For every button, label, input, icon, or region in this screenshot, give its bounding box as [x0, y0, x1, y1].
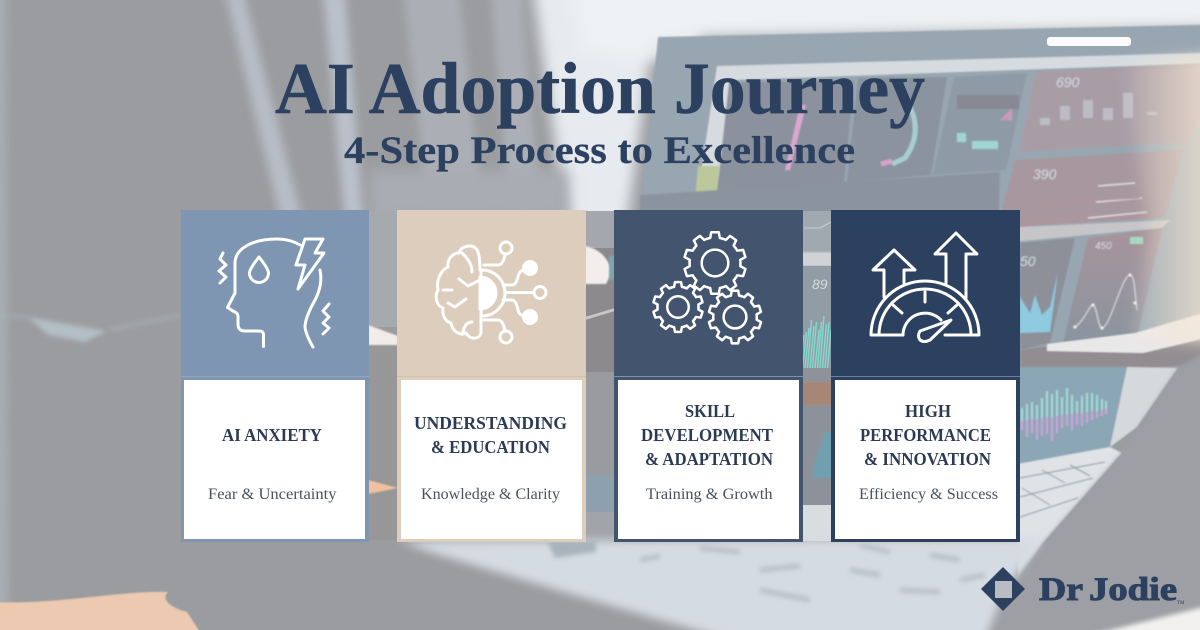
text panel 3	[618, 380, 799, 539]
panel charts on the laptop screen: 50	[1020, 253, 1036, 269]
icon: half brain half circuit	[436, 242, 546, 343]
heading 3: SKILL	[685, 401, 735, 421]
heading 1: AI ANXIETY	[222, 425, 322, 445]
top right sun glare	[1120, 50, 1200, 345]
gap between card 1 and 2	[368, 211, 398, 540]
logo: Dr Jodie: Jodie	[1089, 572, 1177, 608]
heading 3: & ADAPTATION	[645, 449, 773, 469]
caption 2: Knowledge & Clarity	[421, 486, 560, 503]
icon: anxious head with lightning	[219, 239, 329, 347]
panel: step 2 understanding	[397, 210, 586, 542]
panel charts on the laptop screen: 390	[1033, 166, 1057, 182]
heading 4: HIGH	[905, 401, 951, 421]
text panel 1	[184, 380, 365, 539]
caption 3: Training & Growth	[646, 486, 772, 503]
logo: Dr Jodie: TM	[1177, 601, 1185, 606]
caption 1: Fear & Uncertainty	[208, 486, 336, 503]
panel charts on the laptop screen: 450	[1095, 241, 1112, 252]
heading 4	[860, 401, 991, 469]
caption 4: Efficiency & Success	[859, 486, 998, 503]
laptop screen	[640, 24, 1200, 380]
lower right laptop and keyboard	[1018, 302, 1200, 580]
left hand at bottom	[0, 592, 205, 630]
panel: step 1 AI anxiety	[181, 210, 369, 542]
panel charts on the laptop screen: 690	[1056, 74, 1080, 90]
bar chart on lower panel	[1022, 388, 1106, 421]
heading 3	[641, 401, 773, 469]
logo: Dr Jodie: Dr	[1039, 572, 1083, 608]
gap between card 2 and 3	[585, 211, 615, 540]
text panel 2	[401, 380, 582, 539]
heading 4: & INNOVATION	[864, 449, 991, 469]
gap between card 3 and 4	[800, 211, 832, 541]
top-left curtain folds	[0, 0, 542, 630]
panel: step 3 skill development	[614, 210, 803, 542]
heading 2	[414, 413, 567, 457]
panel: step 4 high performance	[831, 210, 1020, 542]
search bar on screen	[1047, 37, 1131, 46]
heading 2: UNDERSTANDING	[414, 413, 567, 433]
left glare	[28, 317, 107, 342]
subtitle: 4-Step Process to Excellence	[344, 129, 855, 172]
logo: Dr Jodie	[981, 567, 1185, 611]
gap between card 3 and 4: 89	[812, 276, 828, 292]
heading 4: PERFORMANCE	[860, 425, 991, 445]
keyboard under cards	[400, 538, 1042, 630]
title: AI Adoption Journey	[275, 48, 925, 129]
heading 2: & EDUCATION	[431, 437, 550, 457]
text panel 4	[835, 380, 1016, 539]
panel charts on the laptop screen	[785, 74, 1160, 333]
icon: three gears	[652, 232, 762, 343]
heading 3: DEVELOPMENT	[641, 425, 773, 445]
icon: speedometer with rising arrows	[871, 233, 979, 342]
